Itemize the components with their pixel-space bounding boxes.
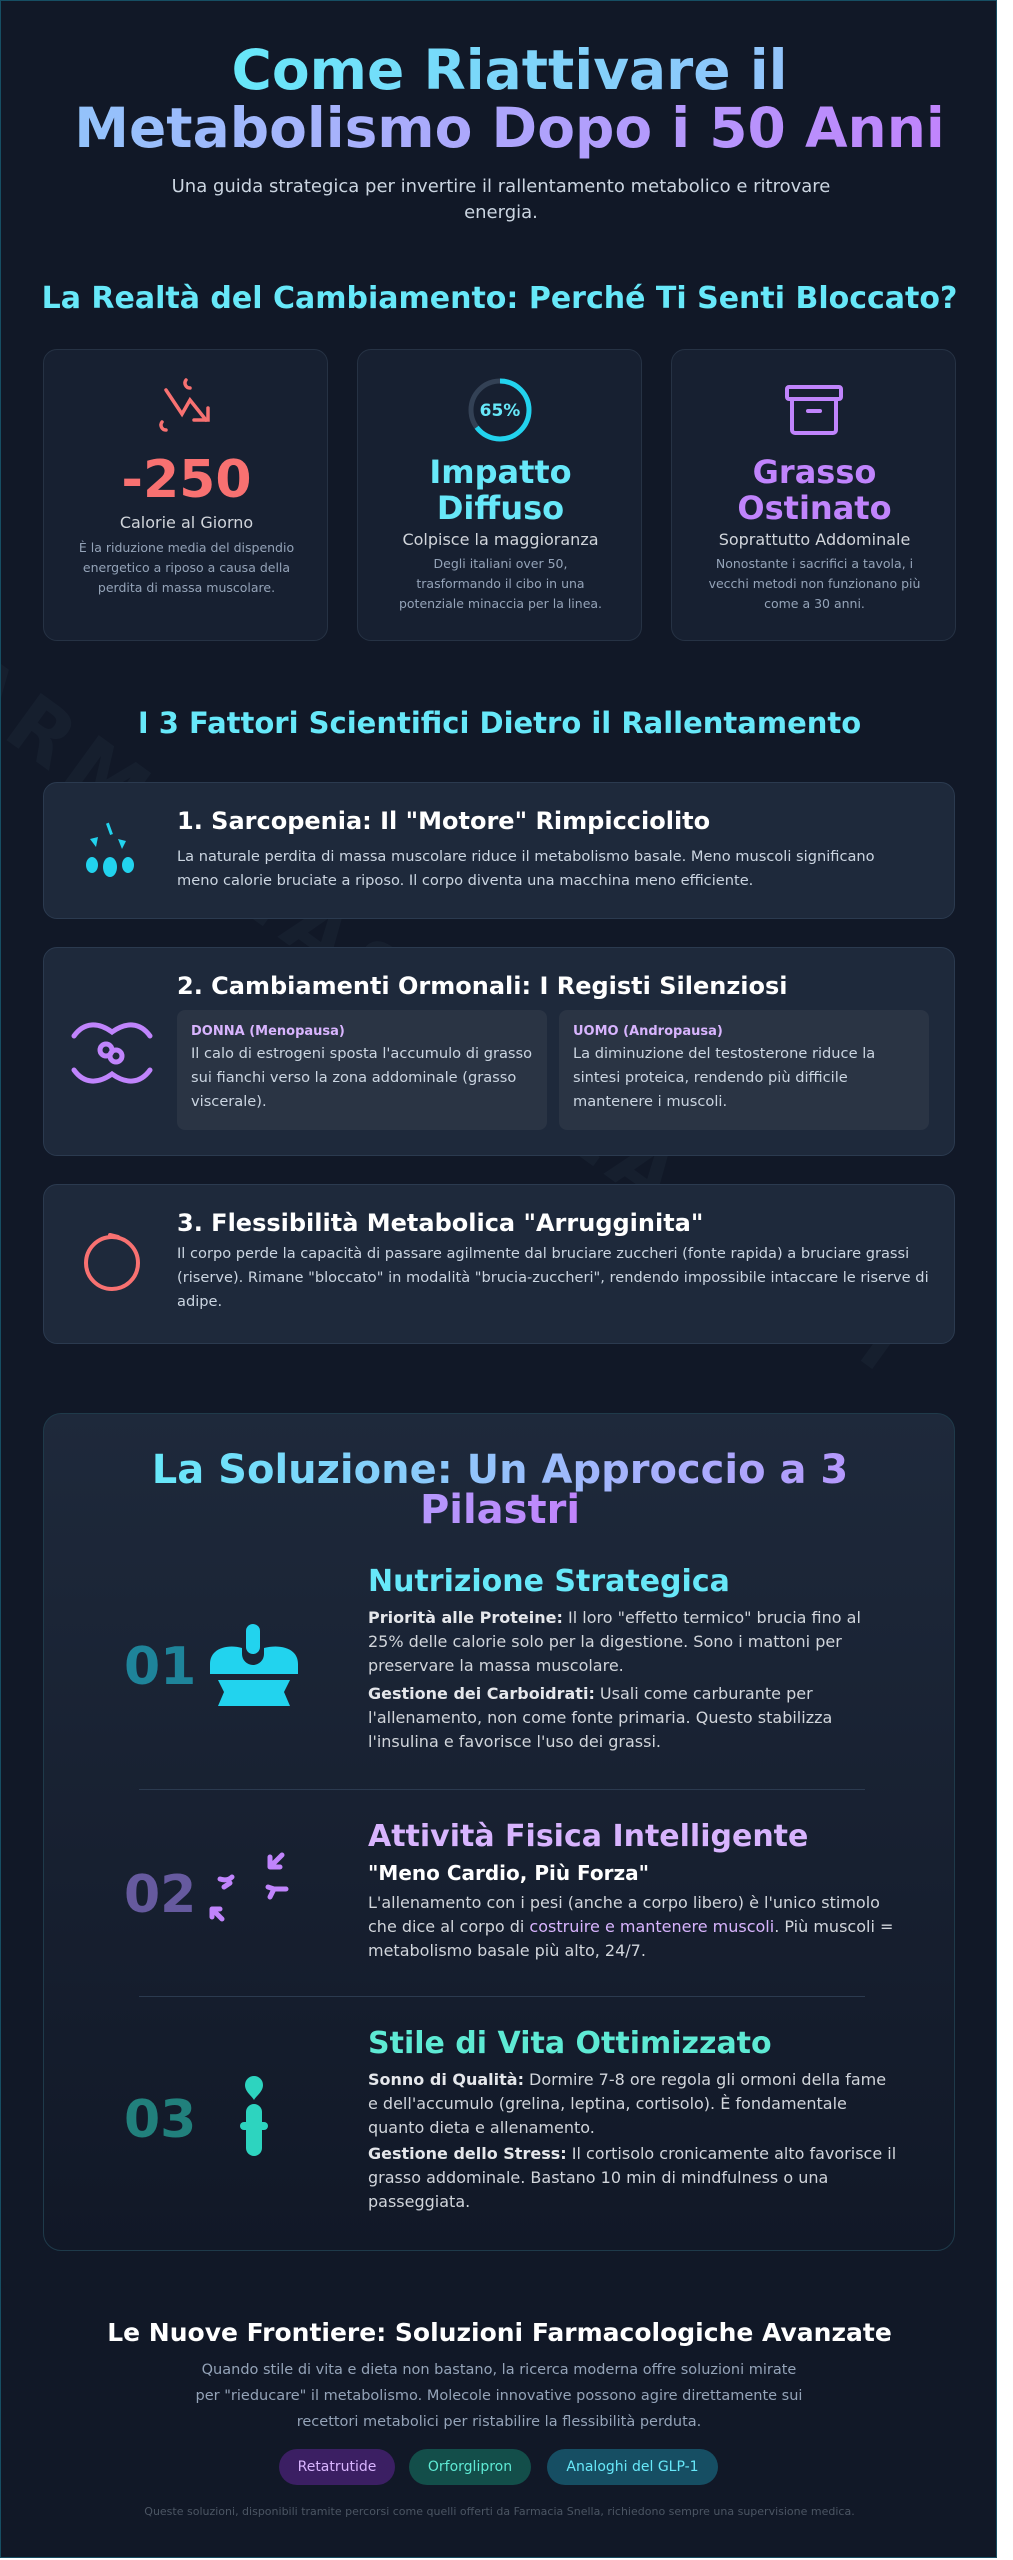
- icon: compress arrows: [210, 1852, 288, 1922]
- icon: person: [240, 2076, 268, 2156]
- pillar 1: [124, 1564, 861, 1751]
- pillar 2: "Meno Cardio, Più Forza": [368, 1861, 649, 1885]
- pill: orforglipron: [409, 2449, 531, 2485]
- heading: soluzione: La Soluzione: Un Approccio a 3: [152, 1447, 848, 1493]
- panel: grasso ostinato: Soprattutto Addominale: [719, 530, 910, 549]
- subtitle: Una guida strategica per invertire il rallentamento metabolico e ritrovare energia.: [172, 176, 830, 223]
- heading: soluzione: Pilastri: [420, 1487, 580, 1533]
- panel: impatto diffuso: Impatto: [429, 453, 572, 491]
- panel: sarcopenia: La naturale perdita di massa muscolare riduce il metabolismo basale. Meno muscoli significano meno calorie bruciate a riposo. Il corpo diventa una macchina meno efficiente.: [177, 848, 875, 889]
- pill: orforglipron: Orforglipron: [428, 2459, 512, 2475]
- sub-panel: donna: DONNA (Menopausa): [191, 1024, 345, 1039]
- panel: flessibilità: [43, 1184, 955, 1344]
- panel: soluzione: [43, 1413, 955, 2251]
- title: Metabolismo Dopo i 50 Anni: [74, 96, 945, 160]
- icon: box: [785, 385, 843, 435]
- icon: hormones: [72, 1022, 152, 1084]
- pillar 2: L'allenamento con i pesi (anche a corpo libero) è l'unico stimolo che dice al corpo di costruire e mantenere muscoli. Più muscoli = metabolismo basale più alto, 24/7.: [368, 1893, 893, 1960]
- panel: flessibilità: 3. Flessibilità Metabolica "Arrugginita": [177, 1209, 703, 1237]
- icon: donut 65%: 65%: [480, 401, 520, 421]
- panel: -250 calorie: Calorie al Giorno: [120, 513, 253, 532]
- text: frontiere: Quando stile di vita e dieta non bastano, la ricerca moderna offre soluzioni mirate per "rieducare" il metabolismo. Molecole innovative possono agire direttamente sui recettori metabolici per ristabilire la flessibilità perduta.: [196, 2362, 802, 2430]
- pillar 1: Nutrizione Strategica: [368, 1564, 730, 1599]
- panel: sarcopenia: [43, 782, 955, 919]
- pillar 3: Gestione dello Stress: Il cortisolo cronicamente alto favorisce il grasso addominale. Bastano 10 min di mindfulness o una passeggiata.: [368, 2144, 896, 2211]
- panel: impatto diffuso: [357, 349, 642, 641]
- pillar 3: 03: [124, 2090, 196, 2150]
- pillar 2: 02: [124, 1865, 196, 1925]
- panel: grasso ostinato: Grasso: [753, 453, 876, 491]
- heading: soluzione: [152, 1447, 848, 1533]
- footnote: Queste soluzioni, disponibili tramite percorsi come quelli offerti da Farmacia Snella, richiedono sempre una supervisione medica.: [144, 2505, 855, 2518]
- panel: sarcopenia: 1. Sarcopenia: Il "Motore" Rimpicciolito: [177, 807, 710, 835]
- title: [74, 38, 945, 160]
- pill: glp-1: [547, 2449, 718, 2485]
- sub-panel: donna: [177, 1010, 547, 1130]
- icon: trend down: [159, 378, 210, 432]
- panel: -250 calorie: [43, 349, 328, 641]
- panel: ormonali: 2. Cambiamenti Ormonali: I Registi Silenziosi: [177, 972, 788, 1000]
- heading: 3 fattori: I 3 Fattori Scientifici Dietro il Rallentamento: [138, 706, 861, 740]
- sub-panel: uomo: UOMO (Andropausa): [573, 1024, 723, 1039]
- panel: grasso ostinato: [671, 349, 956, 641]
- icon: nutrition: [210, 1624, 298, 1706]
- pill: glp-1: Analoghi del GLP-1: [566, 2459, 699, 2475]
- icon: muscle drops: [86, 822, 134, 877]
- panel: -250 calorie: È la riduzione media del dispendio energetico a riposo a causa della perdita di massa muscolare.: [79, 540, 294, 595]
- pillar 2: [124, 1819, 893, 1960]
- panel: impatto diffuso: Diffuso: [437, 489, 564, 527]
- panel: grasso ostinato: Ostinato: [737, 489, 892, 527]
- heading: realtà: La Realtà del Cambiamento: Perché Ti Senti Bloccato?: [42, 281, 957, 316]
- pillar 1: Priorità alle Proteine: Il loro "effetto termico" brucia fino al 25% delle calorie solo per la digestione. Sono i mattoni per preservare la massa muscolare.: [368, 1608, 861, 1675]
- panel: impatto diffuso: Degli italiani over 50, trasformando il cibo in una potenziale minaccia per la linea.: [399, 556, 602, 611]
- title: Come Riattivare il: [232, 38, 787, 102]
- panel: grasso ostinato: Nonostante i sacrifici a tavola, i vecchi metodi non funzionano più come a 30 anni.: [709, 556, 920, 611]
- pillar 2: Attività Fisica Intelligente: [368, 1819, 808, 1854]
- icon: donut 65%: [468, 378, 532, 442]
- pillar 1: 01: [124, 1637, 196, 1697]
- pillar 3: Stile di Vita Ottimizzato: [368, 2026, 772, 2061]
- sub-panel: uomo: [559, 1010, 929, 1130]
- panel: flessibilità: Il corpo perde la capacità di passare agilmente dal bruciare zuccheri (fonte rapida) a bruciare grassi (riserve). Rimane "bloccato" in modalità "brucia-zuccheri", rendendo impossibile intaccare le riserve di adipe.: [177, 1245, 929, 1310]
- pill: retatrutide: [279, 2449, 395, 2485]
- pill: retatrutide: Retatrutide: [298, 2459, 376, 2475]
- heading: nuove frontiere: Le Nuove Frontiere: Soluzioni Farmacologiche Avanzate: [107, 2318, 892, 2347]
- pillar 1: Gestione dei Carboidrati: Usali come carburante per l'allenamento, non come fonte primaria. Questo stabilizza l'insulina e favorisce l'uso dei grassi.: [368, 1684, 832, 1751]
- icon: rusty circle: [84, 1233, 140, 1291]
- panel: ormonali: [43, 947, 955, 1156]
- pillar 3: [124, 2026, 896, 2211]
- stat: -250: [121, 450, 252, 510]
- sub-panel: uomo: La diminuzione del testosterone riduce la sintesi proteica, rendendo più difficile mantenere i muscoli.: [573, 1045, 875, 1110]
- pillar 3: Sonno di Qualità: Dormire 7-8 ore regola gli ormoni della fame e dell'accumulo (grelina, leptina, cortisolo). È fondamentale quanto dieta e allenamento.: [368, 2070, 886, 2137]
- panel: impatto diffuso: Colpisce la maggioranza: [402, 530, 599, 549]
- sub-panel: donna: Il calo di estrogeni sposta l'accumulo di grasso sui fianchi verso la zona addominale (grasso viscerale).: [191, 1045, 532, 1110]
